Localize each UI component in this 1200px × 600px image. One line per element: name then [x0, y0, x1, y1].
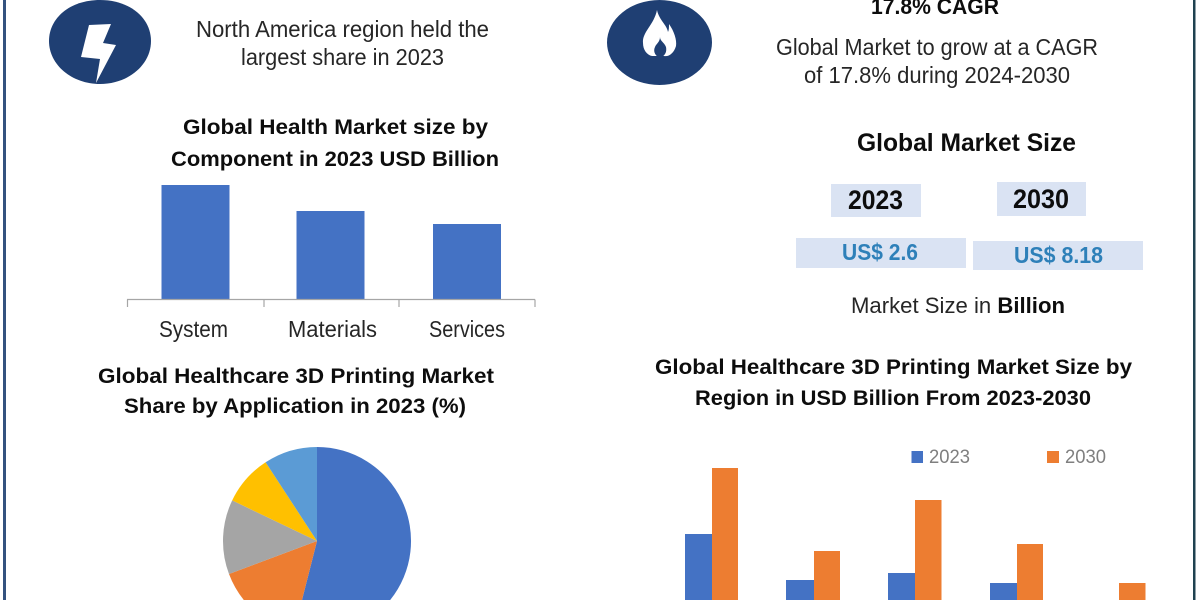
legend: years	[912, 447, 1106, 468]
text: North America region share: largest share in 2023	[241, 44, 444, 70]
stat: 2030 year label	[997, 182, 1086, 216]
text: CAGR description	[776, 34, 1098, 88]
bar chart: market size by component: System	[159, 316, 228, 342]
text: CAGR description: Global Market to grow at a CAGR	[776, 34, 1098, 60]
stat: 2030 market value: US$ 8.18	[1014, 242, 1103, 268]
text: CAGR description: of 17.8% during 2024-2030	[804, 62, 1070, 88]
icon: flame badge	[607, 0, 712, 85]
pie chart: share by application	[223, 447, 411, 600]
heading: market share by application: Global Healthcare 3D Printing Market	[98, 364, 494, 388]
heading: component bar chart: Component in 2023 USD Billion	[171, 147, 499, 171]
stat: 2030 year label: 2030	[1013, 184, 1069, 214]
stat: 2023 year label: 2023	[848, 185, 903, 215]
bar chart: market size by component: Materials	[288, 316, 377, 342]
heading: market size by region	[655, 355, 1132, 410]
bar chart: market size by component	[127, 185, 535, 342]
legend: years: 2023	[929, 447, 970, 468]
text: market size unit note: Market Size in Billion	[851, 293, 1065, 318]
bar chart: market size by component: Services	[429, 316, 505, 342]
heading: component bar chart: Global Health Market size by	[183, 115, 488, 139]
stat: 2023 year label	[831, 184, 921, 217]
stat: 2023 market value	[796, 238, 966, 268]
heading: global market size: Global Market Size	[857, 129, 1076, 157]
bar chart: market size by region	[685, 468, 1146, 600]
text: North America region share	[196, 16, 489, 70]
heading: market share by application	[98, 364, 494, 418]
stat: 2023 market value: US$ 2.6	[842, 239, 918, 265]
icon: lightning bolt badge	[49, 0, 151, 84]
stat: 2030 market value	[973, 241, 1143, 270]
heading: market size by region: Region in USD Billion From 2023-2030	[695, 386, 1091, 410]
heading: component bar chart	[171, 115, 499, 171]
legend: years: 2030	[1065, 447, 1106, 468]
heading: market size by region: Global Healthcare 3D Printing Market Size by	[655, 355, 1132, 379]
heading: market share by application: Share by Application in 2023 (%)	[124, 394, 466, 418]
text: North America region share: North America region held the	[196, 16, 489, 42]
